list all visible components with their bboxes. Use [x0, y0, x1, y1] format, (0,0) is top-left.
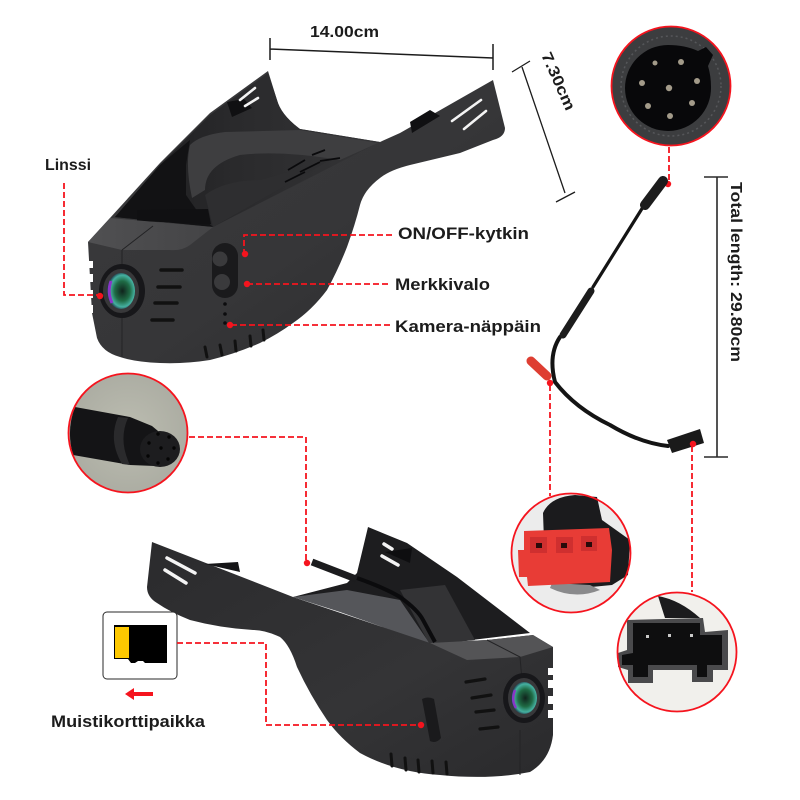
icon: micro SD card: [114, 625, 167, 663]
red plug: [531, 361, 547, 376]
bottom camera unit: [147, 527, 553, 777]
label: Kamera-näppäin: Kamera-näppäin: [395, 318, 541, 336]
circle: black connector detail: [618, 592, 736, 712]
vent slots: [152, 270, 182, 320]
dimension: width 14.00cm: 14.00cm: [310, 24, 379, 41]
bottom slots: [391, 754, 447, 774]
vent slots: [466, 679, 498, 729]
circle: red connector detail: [512, 494, 630, 612]
memory card icon box: [103, 612, 177, 679]
label: ON/OFF-kytkin: ON/OFF-kytkin: [398, 225, 529, 243]
callout line: red plug to circle: [547, 380, 553, 496]
camera top face: [430, 635, 553, 660]
lens: [99, 264, 145, 318]
camera body silhouette: [147, 542, 553, 777]
label: Merkkivalo: Merkkivalo: [395, 276, 490, 294]
cable run: [593, 207, 643, 287]
label: Linssi: Linssi: [45, 157, 91, 174]
dimension: total length 29.80cm: [704, 177, 744, 457]
bottom slots: [205, 330, 264, 357]
arrow: insert direction: [125, 688, 153, 700]
callout line: jack to camera cable: [189, 437, 310, 566]
dimension: height 7.30cm: 7.30cm: [537, 50, 578, 113]
callout line: Merkkivalo: [244, 281, 388, 287]
camera mount cavity: [115, 73, 380, 227]
dimension: height 7.30cm: [512, 50, 578, 202]
callout line: Kamera-näppäin: [227, 322, 390, 328]
camera body silhouette: [88, 71, 505, 363]
right notches: [548, 668, 553, 718]
indicator holes: [223, 302, 227, 325]
left notches: [88, 261, 93, 313]
camera top face: [88, 218, 213, 250]
camera mount cavity: [293, 527, 530, 645]
callout line: ON/OFF: [242, 235, 392, 257]
lens: [503, 673, 545, 723]
memory card slot: [422, 698, 441, 742]
callout line: Linssi: [64, 183, 103, 299]
circle: camera jack detail: [68, 374, 188, 492]
wiring cable: [531, 181, 704, 453]
top camera unit: [88, 71, 505, 363]
molded sections: [645, 181, 663, 205]
label: Muistikorttipaikka: Muistikorttipaikka: [51, 712, 206, 731]
callout line: socket to cable: [665, 147, 671, 187]
power and camera buttons: [212, 243, 238, 298]
cable with plug: [357, 578, 435, 642]
callout line: card slot: [177, 643, 424, 728]
dimension: total length 29.80cm: Total length: 29.80cm: [727, 182, 744, 362]
callout line: black connector to circle: [690, 441, 696, 592]
wing slits and clip: [165, 544, 398, 583]
dimension: width 14.00cm: [270, 24, 493, 70]
mount clips and slits: [137, 99, 440, 224]
black connector: [667, 429, 704, 453]
circle: 8-pin socket detail: [612, 26, 730, 146]
